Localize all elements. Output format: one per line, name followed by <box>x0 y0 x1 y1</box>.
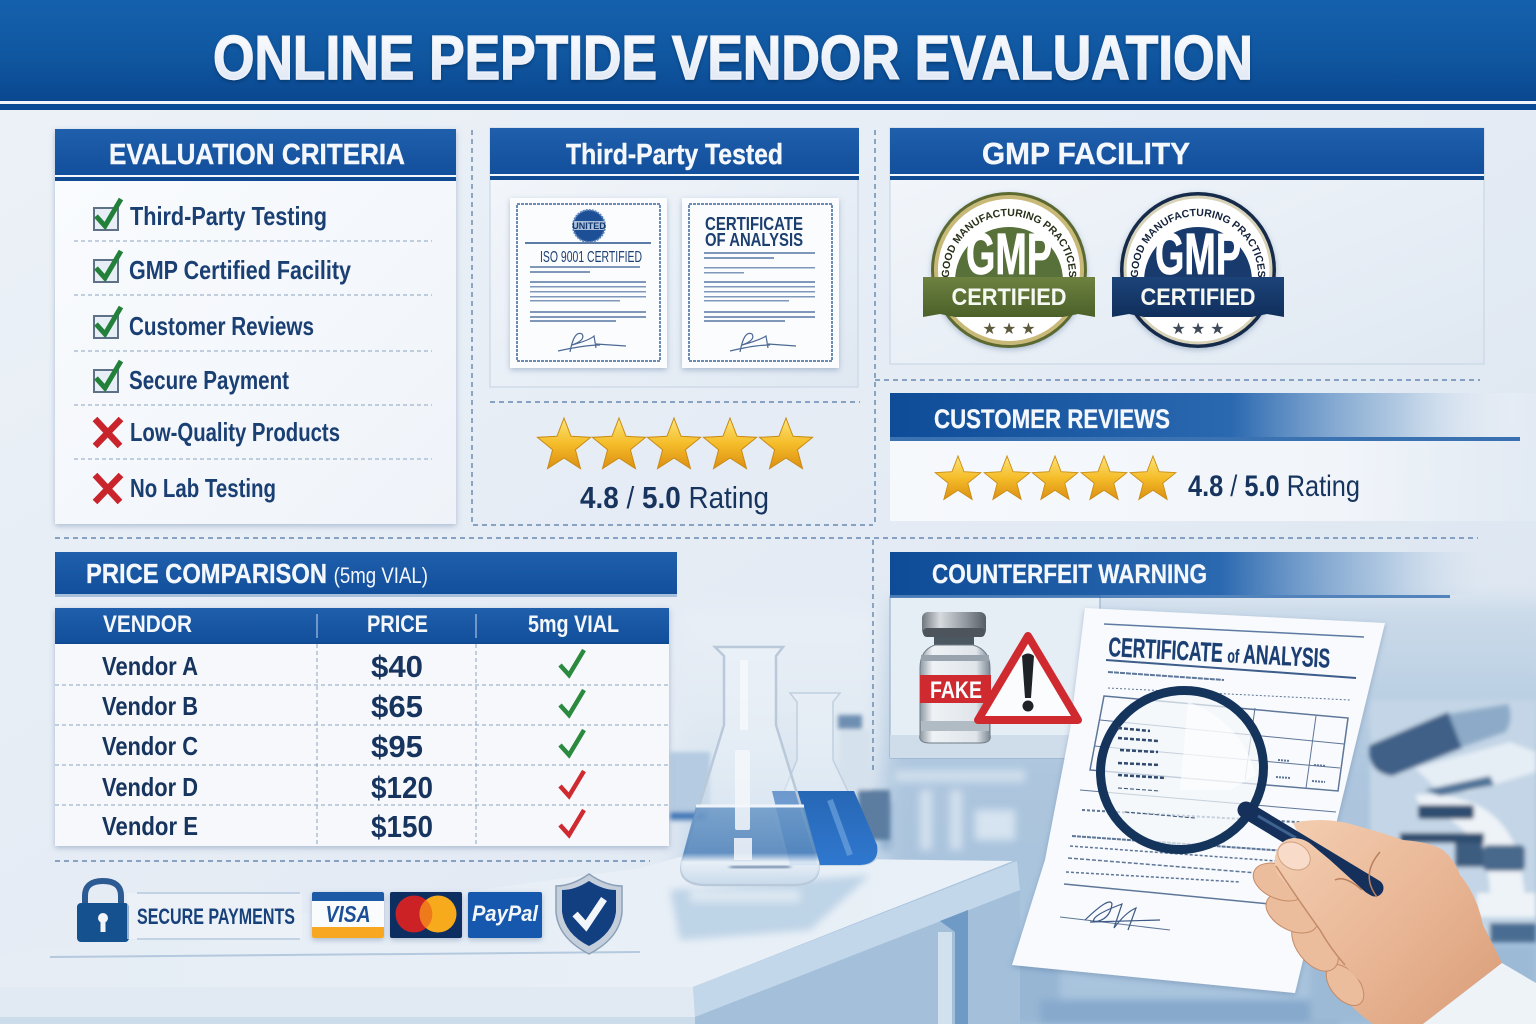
row: Vendor D: $120 <box>371 770 433 805</box>
document: certificate of analysis <box>682 198 839 368</box>
heading: EVALUATION CRITERIA <box>109 139 405 171</box>
document: certificate of analysis under magnifier <box>1012 608 1385 993</box>
badge: green GMP certified: ★ ★ ★ <box>982 319 1036 338</box>
row: Vendor A: Vendor A <box>102 651 198 681</box>
rating block: five stars <box>537 418 813 515</box>
row: Vendor A: $40 <box>371 649 423 684</box>
table leg <box>940 910 968 1024</box>
heading: GMP FACILITY <box>982 136 1190 171</box>
icon: fake vial: FAKE <box>930 677 982 704</box>
criterion: Secure Payment: Secure Payment <box>129 365 289 395</box>
hand back and index finger <box>1293 820 1502 1024</box>
badge: navy GMP certified: CERTIFIED <box>1140 284 1256 311</box>
microscope <box>1369 700 1536 943</box>
row separators <box>74 241 432 459</box>
card: Visa <box>312 892 384 938</box>
criterion: Low-Quality Products: Low-Quality Products <box>130 417 340 447</box>
background lab scene <box>0 600 1536 1024</box>
counter front face <box>693 861 1020 1017</box>
stars <box>935 456 1176 499</box>
criterion: GMP Certified Facility: GMP Certified Facility <box>129 255 351 285</box>
title: ONLINE PEPTIDE VENDOR EVALUATION <box>213 24 1253 93</box>
icon: padlock <box>77 881 129 942</box>
price table: 5mg VIAL <box>528 611 619 638</box>
document: ISO 9001 certificate <box>510 198 667 368</box>
row: Vendor E <box>102 809 584 844</box>
blurred beaker and bottle <box>670 715 890 840</box>
illustration: lab flasks <box>681 647 877 885</box>
badge: green GMP certified: GMP <box>966 222 1052 287</box>
stars <box>537 418 813 469</box>
rating text: 4.8 / 5.0 Rating <box>580 480 769 515</box>
row: Vendor D <box>102 770 584 805</box>
badge: green GMP certified: GOOD MANUFACTURING PRACTICES <box>942 208 1076 277</box>
icon: fake vial <box>920 612 991 743</box>
blurred shelves <box>880 770 1340 1024</box>
price table: PRICE <box>367 611 428 638</box>
section dividers <box>55 130 1480 861</box>
document: ISO 9001 certificate: UNITED <box>572 221 606 231</box>
counter reflections <box>670 875 870 940</box>
icon: magnifying glass and hand <box>1074 664 1536 1024</box>
badge: navy GMP certified <box>1112 191 1284 353</box>
secure payments strip <box>77 874 622 954</box>
heading: COUNTERFEIT WARNING <box>932 559 1207 589</box>
row: Vendor D: Vendor D <box>102 772 198 802</box>
criterion: No Lab Testing <box>95 473 276 503</box>
row: Vendor B <box>102 689 584 724</box>
thumb <box>1273 837 1405 990</box>
small blue flask <box>772 693 877 865</box>
heading: PRICE COMPARISON (5mg VIAL) <box>86 558 428 589</box>
criterion: Customer Reviews <box>94 307 314 341</box>
shirt cuff <box>1423 963 1536 1024</box>
row: Vendor C: Vendor C <box>102 731 198 761</box>
heading: Third-Party Tested <box>566 139 783 171</box>
icon: warning triangle <box>978 636 1078 720</box>
row: Vendor B: Vendor B <box>102 691 198 721</box>
title banner <box>0 0 1536 110</box>
row: Vendor E: Vendor E <box>102 811 198 841</box>
row: Vendor C <box>102 729 584 764</box>
label <box>127 893 302 939</box>
heading: CUSTOMER REVIEWS <box>934 404 1170 434</box>
document: ISO 9001 certificate: ISO 9001 CERTIFIED <box>540 249 642 266</box>
document: certificate of analysis: CERTIFICATE <box>705 214 803 234</box>
row: Vendor E: $150 <box>371 809 433 844</box>
badge: navy GMP certified: ★ ★ ★ <box>1171 319 1225 338</box>
criterion: No Lab Testing: No Lab Testing <box>130 473 276 503</box>
criterion: Third-Party Testing: Third-Party Testing <box>130 201 327 231</box>
row: Vendor A <box>102 649 584 684</box>
rating text: 4.8 / 5.0 Rating <box>1188 470 1360 503</box>
badge: navy GMP certified: GOOD MANUFACTURING PRACTICES <box>1130 208 1266 277</box>
criterion: Third-Party Testing <box>94 199 327 231</box>
panel: third-party tested <box>490 128 859 387</box>
price table: VENDOR <box>103 611 192 638</box>
card: Mastercard <box>390 892 462 938</box>
badge: navy GMP certified: GMP <box>1155 222 1241 287</box>
row: Vendor B: $65 <box>371 689 423 724</box>
card: PayPal: PayPal <box>472 901 539 926</box>
lower fingers <box>1248 856 1371 1012</box>
card: PayPal <box>468 892 542 938</box>
criterion: Customer Reviews: Customer Reviews <box>129 311 314 341</box>
criterion: GMP Certified Facility <box>94 251 351 285</box>
criterion: Low-Quality Products <box>95 417 340 447</box>
label: SECURE PAYMENTS <box>137 904 295 929</box>
hand creases <box>1335 852 1380 897</box>
row: Vendor C: $95 <box>371 729 423 764</box>
icon: security shield <box>556 874 622 954</box>
counter top <box>0 857 1013 987</box>
criterion: Secure Payment <box>94 361 289 395</box>
badge: green GMP certified <box>923 191 1095 353</box>
card: Visa: VISA <box>326 901 370 927</box>
large flask <box>681 647 819 885</box>
price table <box>55 608 669 846</box>
magnifier <box>1074 664 1375 888</box>
document: certificate of analysis: OF ANALYSIS <box>705 230 803 250</box>
panel: GMP facility <box>890 128 1484 364</box>
badge: green GMP certified: CERTIFIED <box>952 284 1066 311</box>
panel: customer reviews <box>890 393 1536 521</box>
counter underside <box>690 890 1020 1024</box>
heading: CERTIFICATE of ANALYSIS <box>1108 632 1331 674</box>
panel: counterfeit warning <box>890 552 1490 758</box>
panel: price comparison <box>55 552 677 846</box>
panel: evaluation criteria <box>55 129 456 524</box>
